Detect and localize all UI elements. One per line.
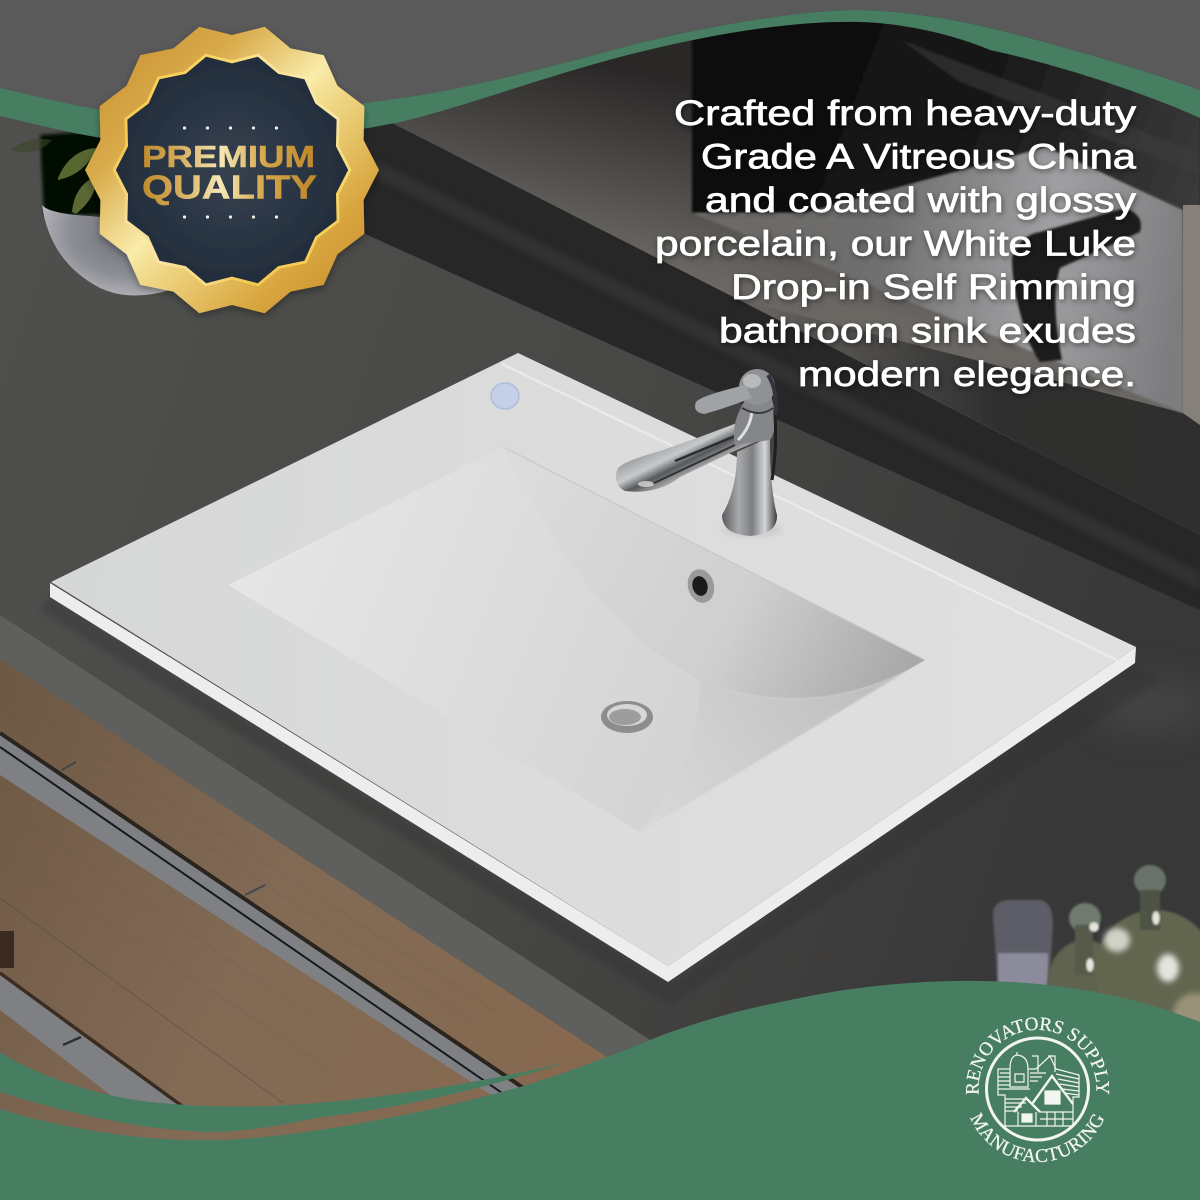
badge text: QUALITY (142, 170, 317, 206)
description text: Crafted from heavy-duty (674, 94, 1137, 133)
white drop-in sink (50, 353, 1136, 982)
top green wave (0, 10, 1200, 146)
shadow under sink (40, 597, 1160, 1005)
chrome faucet (616, 369, 782, 537)
label sticker (491, 383, 519, 409)
description text: porcelain, our White Luke (655, 224, 1136, 264)
badge text: PREMIUM (142, 140, 315, 174)
description text: Drop-in Self Rimming (731, 268, 1136, 307)
description text: modern elegance. (798, 355, 1136, 394)
bottom thin green wave (0, 1052, 567, 1132)
badge dots bottom (183, 215, 278, 219)
bottom green wave (0, 981, 1200, 1200)
sink top deck (51, 353, 1136, 966)
description text: and coated with glossy (705, 181, 1137, 220)
badge text (142, 140, 317, 206)
logo arc text top: RENOVATORS SUPPLY (966, 1017, 1110, 1094)
background soap dispenser and glass bottles (993, 865, 1200, 1037)
overflow hole (684, 566, 718, 606)
basin bowl (228, 447, 925, 832)
potted plant (10, 130, 170, 296)
Renovators Supply Manufacturing logo (966, 1017, 1110, 1162)
description text (655, 94, 1137, 394)
badge bright rim (113, 54, 351, 286)
sink front edge (50, 583, 1136, 982)
badge navy center (116, 57, 348, 283)
logo house (998, 1052, 1079, 1126)
pop-up drain (601, 701, 653, 733)
back wall, ledge and mirror (363, 0, 1200, 610)
logo ring (986, 1038, 1088, 1140)
description text: bathroom sink exudes (719, 312, 1136, 350)
badge gold outer (85, 27, 379, 313)
top grey overlay (0, 0, 1200, 118)
badge dots top (183, 126, 278, 130)
counter front lip band (0, 615, 650, 1057)
logo arc text bottom: MANUFACTURING (970, 1112, 1104, 1162)
soft light beside the sink corner (1090, 677, 1200, 733)
description text: Grade A Vitreous China (701, 138, 1137, 176)
premium quality badge (85, 27, 379, 313)
wood cabinet drawers (0, 659, 620, 1200)
reflected faucet (1012, 208, 1141, 362)
